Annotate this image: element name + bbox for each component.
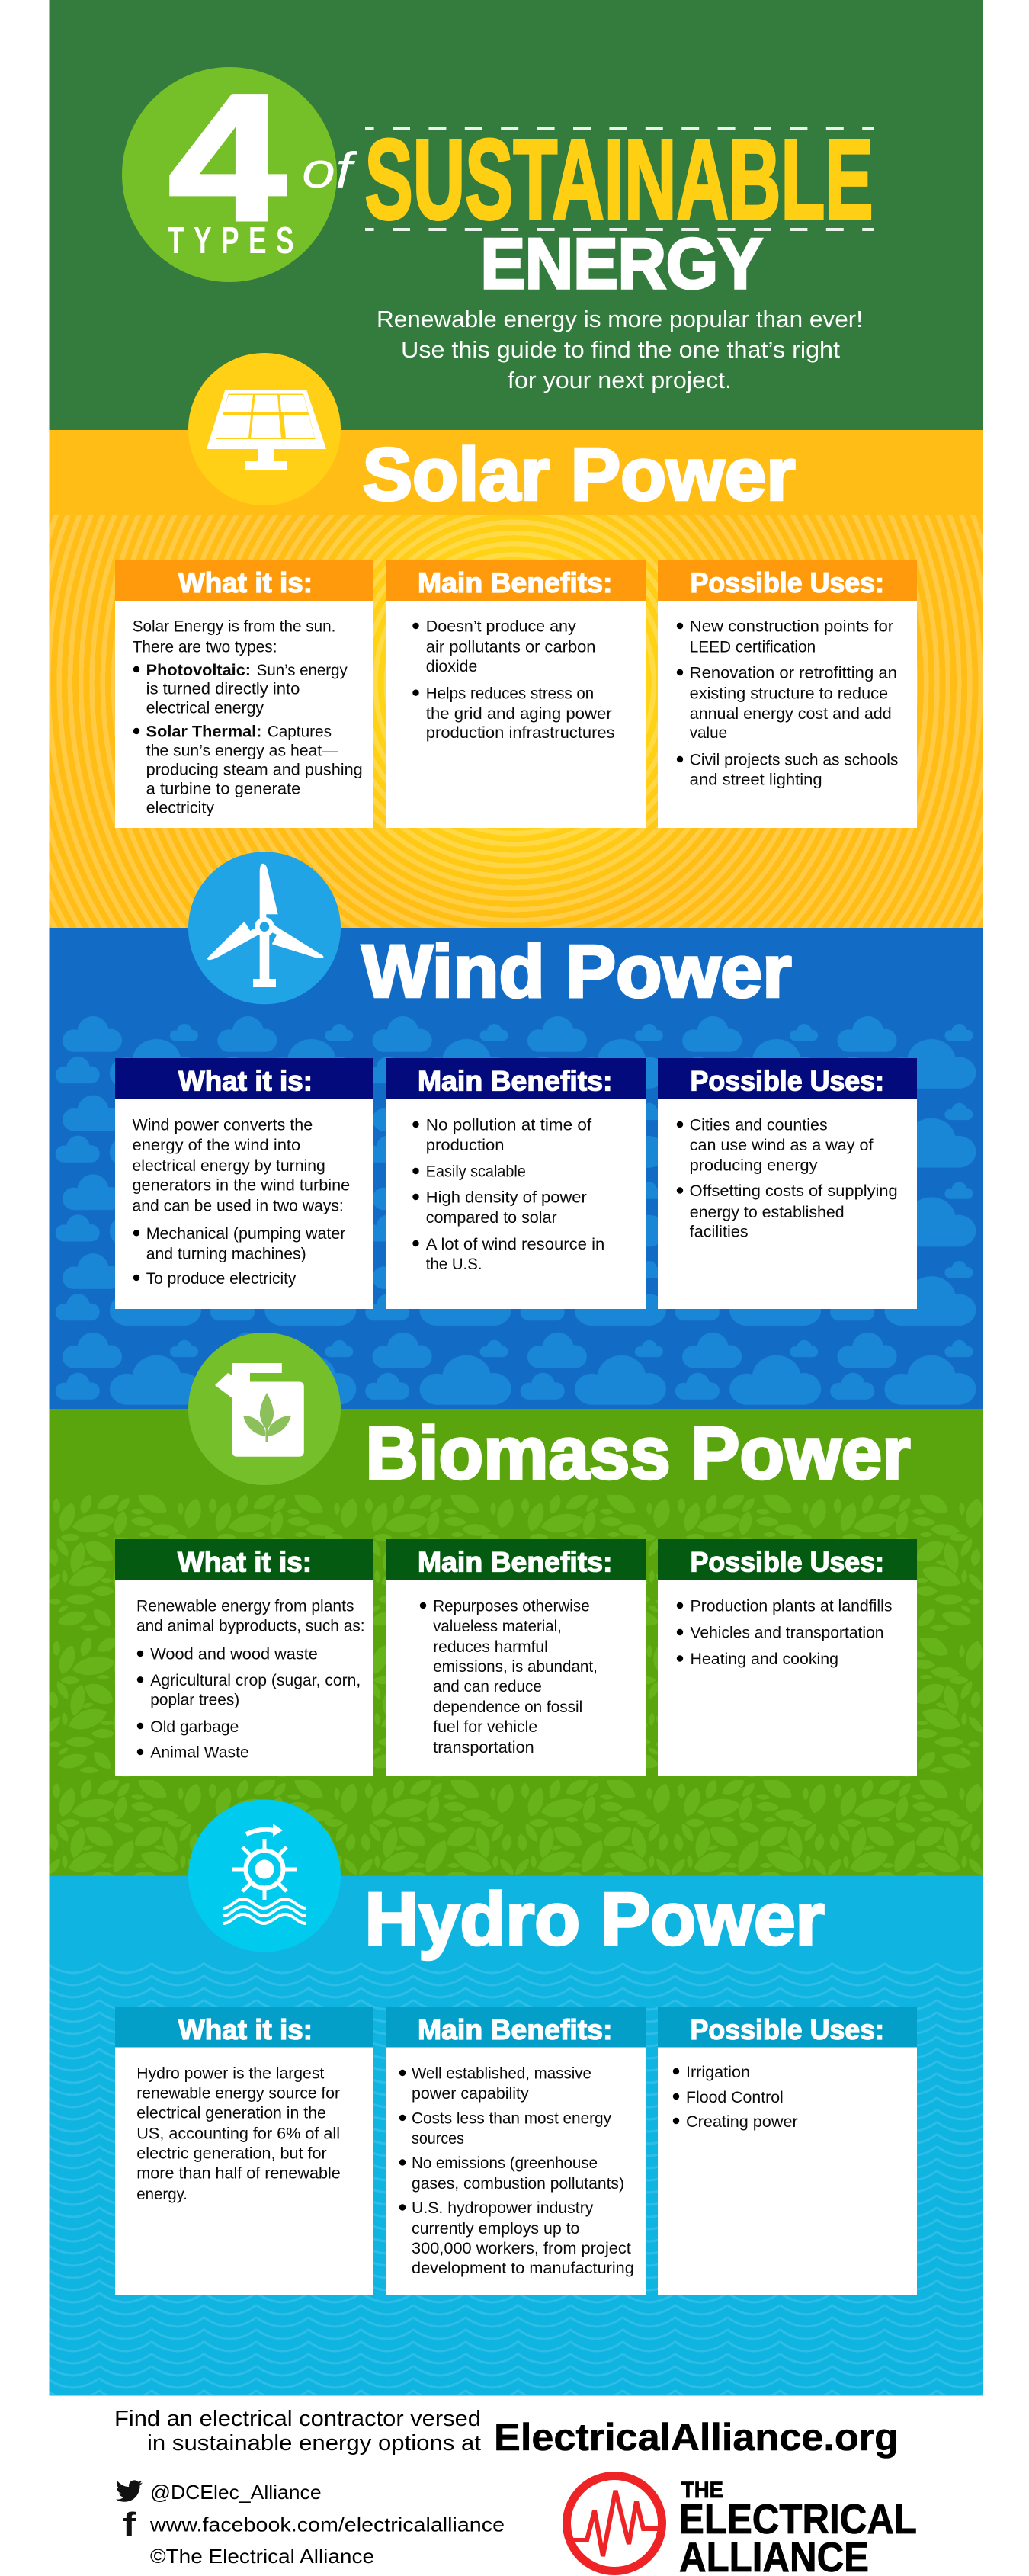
card: wind what it is: energy of the wind into xyxy=(133,1136,300,1154)
card: solar possible uses: New construction points for xyxy=(690,618,893,636)
panel: solar power xyxy=(49,353,983,928)
card: wind what it is: What it is: xyxy=(178,1066,313,1097)
icon: wind turbine xyxy=(188,852,341,1004)
card: hydro what it is: What it is: xyxy=(178,2014,313,2045)
card: solar what it is: electricity xyxy=(146,799,214,817)
card: hydro main benefits: gases, combustion pollutants) xyxy=(412,2174,624,2193)
panel: wind power xyxy=(49,852,983,1409)
card: hydro main benefits: No emissions (greenhouse xyxy=(412,2154,598,2172)
card: hydro main benefits: Well established, massive xyxy=(412,2064,591,2083)
card: wind what it is: and turning machines) xyxy=(146,1245,306,1263)
card: wind possible uses: Offsetting costs of supplying xyxy=(690,1182,898,1200)
icon: facebook f: f xyxy=(123,2506,136,2543)
card: biomass possible uses: Production plants at landfills xyxy=(691,1597,892,1615)
heading: solar power: Solar Power xyxy=(363,433,796,515)
heading: wind power: Wind Power xyxy=(361,930,791,1012)
icon: solar panel xyxy=(188,353,341,505)
panel: hydro power xyxy=(49,1799,983,2396)
heading: biomass power: Biomass Power xyxy=(366,1412,910,1494)
card: hydro what it is: electric generation, but for xyxy=(136,2145,327,2163)
card: wind what it is: and can be used in two ways: xyxy=(133,1196,344,1214)
card: wind what it is: generators in the wind turbine xyxy=(133,1176,350,1195)
call to action text xyxy=(114,2407,481,2456)
card: biomass main benefits: reduces harmful xyxy=(433,1638,548,1656)
card: hydro main benefits: Costs less than most energy xyxy=(412,2109,611,2128)
card: wind main benefits: No pollution at time of xyxy=(426,1116,591,1134)
card: biomass possible uses: Vehicles and transportation xyxy=(691,1624,884,1642)
card: wind possible uses: Possible Uses: xyxy=(691,1066,884,1097)
card: wind main benefits: High density of power xyxy=(426,1189,587,1207)
header panel xyxy=(49,0,983,430)
card: wind main benefits: Easily scalable xyxy=(426,1163,526,1181)
card: hydro possible uses: Irrigation xyxy=(686,2063,750,2081)
card: wind possible uses: facilities xyxy=(690,1222,749,1240)
icon: twitter bird xyxy=(116,2480,143,2502)
card: solar main benefits: the grid and aging power xyxy=(426,704,612,723)
card: hydro what it is: Hydro power is the largest xyxy=(136,2064,324,2083)
card: wind what it is: Mechanical (pumping water xyxy=(146,1224,345,1243)
card: solar what it is: electrical energy xyxy=(146,699,264,717)
card: wind possible uses: producing energy xyxy=(690,1156,818,1174)
card: solar possible uses: Possible Uses: xyxy=(691,567,884,598)
card: solar possible uses xyxy=(658,560,917,828)
card: biomass what it is: Old garbage xyxy=(150,1718,239,1736)
card: wind main benefits: compared to solar xyxy=(426,1208,557,1227)
website address: ElectricalAlliance.org xyxy=(494,2416,899,2459)
card: biomass what it is: Renewable energy from plants xyxy=(136,1597,354,1615)
card: hydro what it is: energy. xyxy=(136,2185,188,2203)
card: solar what it is: Photovoltaic: xyxy=(146,661,251,679)
card: solar main benefits: production infrastructures xyxy=(426,723,615,742)
card: biomass possible uses: Possible Uses: xyxy=(691,1547,884,1578)
copyright: ©The Electrical Alliance xyxy=(150,2545,374,2568)
card: biomass main benefits: transportation xyxy=(433,1738,534,1756)
twitter handle: @DCElec_Alliance xyxy=(150,2481,322,2504)
intro text: Use this guide to find the one that’s right xyxy=(401,336,840,363)
card: wind what it is: To produce electricity xyxy=(146,1269,297,1288)
card: hydro possible uses: Flood Control xyxy=(686,2088,784,2106)
logo: the electrical alliance xyxy=(566,2476,917,2576)
card: biomass what it is xyxy=(115,1539,373,1776)
card: biomass main benefits: and can reduce xyxy=(433,1677,542,1695)
card: hydro possible uses xyxy=(658,2007,917,2295)
card: biomass what it is: Wood and wood waste xyxy=(150,1645,318,1663)
title: energy: ENERGY xyxy=(480,223,762,303)
card: solar what it is: What it is: xyxy=(178,567,313,598)
card: solar what it is: Solar Energy is from the sun. xyxy=(133,618,335,636)
intro text xyxy=(377,306,863,393)
card: solar what it is: a turbine to generate xyxy=(146,780,300,798)
card: solar possible uses: existing structure to reduce xyxy=(690,684,888,702)
call to action text: Find an electrical contractor versed xyxy=(114,2407,481,2431)
card: wind main benefits: production xyxy=(426,1136,505,1154)
card: solar possible uses: and street lighting xyxy=(690,771,822,789)
card: hydro main benefits: sources xyxy=(412,2129,464,2148)
card: solar possible uses: annual energy cost and add xyxy=(690,704,892,723)
card: solar what it is: the sun’s energy as heat— xyxy=(146,742,338,760)
card: hydro main benefits: 300,000 workers, from project xyxy=(412,2239,631,2257)
card: hydro main benefits xyxy=(386,2007,646,2295)
footer xyxy=(114,2407,917,2576)
card: wind main benefits: the U.S. xyxy=(426,1255,482,1273)
card: hydro what it is: renewable energy source for xyxy=(136,2084,340,2103)
card: biomass main benefits: fuel for vehicle xyxy=(433,1718,537,1736)
card: solar main benefits: Main Benefits: xyxy=(418,567,613,598)
card: biomass main benefits: dependence on fossil xyxy=(433,1698,582,1716)
card: wind what it is: Wind power converts the xyxy=(133,1116,313,1134)
intro text: Renewable energy is more popular than ever! xyxy=(377,306,863,332)
card: solar what it is xyxy=(115,560,373,828)
card: biomass main benefits: Repurposes otherwise xyxy=(433,1597,590,1615)
card: biomass what it is: Agricultural crop (sugar, corn, xyxy=(150,1671,361,1689)
word: of: of xyxy=(302,142,358,198)
call to action text: in sustainable energy options at xyxy=(147,2431,481,2456)
card: hydro what it is xyxy=(115,2007,373,2295)
card: wind main benefits xyxy=(386,1058,646,1309)
card: biomass main benefits: valueless material, xyxy=(433,1617,562,1635)
card: biomass what it is: What it is: xyxy=(178,1547,312,1578)
panel: biomass power xyxy=(49,1333,983,1876)
card: solar main benefits: Helps reduces stress on xyxy=(426,684,594,702)
card: solar what it is: Captures xyxy=(268,723,332,741)
card: solar possible uses: Renovation or retrofitting an xyxy=(690,664,897,682)
card: hydro main benefits: power capability xyxy=(412,2084,529,2103)
card: hydro main benefits: Main Benefits: xyxy=(418,2014,613,2045)
card: solar possible uses: value xyxy=(690,723,727,742)
icon: water wheel xyxy=(188,1799,341,1952)
card: solar what it is: Solar Thermal: xyxy=(146,723,261,741)
card: hydro possible uses: Possible Uses: xyxy=(691,2014,884,2045)
intro text: for your next project. xyxy=(508,367,732,393)
card: solar what it is: producing steam and pushing xyxy=(146,761,363,779)
card: solar main benefits xyxy=(386,560,646,828)
card: hydro main benefits: U.S. hydropower industry xyxy=(412,2199,594,2217)
card: solar main benefits: Doesn’t produce any xyxy=(426,618,576,636)
card: solar possible uses: Civil projects such as schools xyxy=(690,751,898,769)
icon: biofuel jug xyxy=(188,1333,341,1485)
card: wind what it is xyxy=(115,1058,373,1309)
card: wind possible uses: can use wind as a way of xyxy=(690,1136,874,1154)
card: solar possible uses: LEED certification xyxy=(690,637,816,656)
card: solar what it is: There are two types: xyxy=(133,638,277,656)
card: biomass possible uses: Heating and cooking xyxy=(691,1650,838,1668)
card: hydro what it is: more than half of renewable xyxy=(136,2164,341,2183)
card: hydro what it is: electrical generation in the xyxy=(136,2103,326,2122)
card: solar main benefits: dioxide xyxy=(426,657,477,675)
card: hydro main benefits: currently employs up to xyxy=(412,2219,579,2238)
card: biomass main benefits: emissions, is abundant, xyxy=(433,1657,598,1676)
card: solar main benefits: air pollutants or carbon xyxy=(426,637,596,656)
card: biomass what it is: and animal byproducts, such as: xyxy=(136,1616,365,1634)
card: hydro main benefits: development to manufacturing xyxy=(412,2259,634,2277)
card: wind possible uses: energy to established xyxy=(690,1203,845,1221)
badge: 4 types: TYPES xyxy=(168,220,294,261)
badge: 4 types xyxy=(122,57,337,282)
logo: the electrical alliance: ELECTRICAL xyxy=(679,2495,917,2542)
card: wind what it is: electrical energy by turning xyxy=(133,1156,325,1175)
badge: 4 types: 4 xyxy=(168,57,286,258)
card: biomass main benefits xyxy=(386,1539,646,1776)
card: biomass main benefits: Main Benefits: xyxy=(418,1547,613,1578)
card: biomass possible uses xyxy=(658,1539,917,1776)
card: wind main benefits: Main Benefits: xyxy=(418,1066,613,1097)
heading: hydro power: Hydro Power xyxy=(364,1877,825,1961)
logo: the electrical alliance: THE xyxy=(681,2478,723,2503)
card: solar what it is: Sun’s energy xyxy=(257,661,348,679)
card: wind main benefits: A lot of wind resource in xyxy=(426,1235,604,1253)
card: wind possible uses xyxy=(658,1058,917,1309)
facebook url: www.facebook.com/electricalalliance xyxy=(149,2513,505,2536)
card: wind possible uses: Cities and counties xyxy=(690,1116,828,1134)
card: hydro what it is: US, accounting for 6% of all xyxy=(136,2125,340,2143)
card: biomass what it is: poplar trees) xyxy=(150,1691,239,1709)
card: solar what it is: is turned directly into xyxy=(146,680,300,698)
card: biomass what it is: Animal Waste xyxy=(150,1744,249,1762)
card: hydro possible uses: Creating power xyxy=(686,2112,798,2131)
